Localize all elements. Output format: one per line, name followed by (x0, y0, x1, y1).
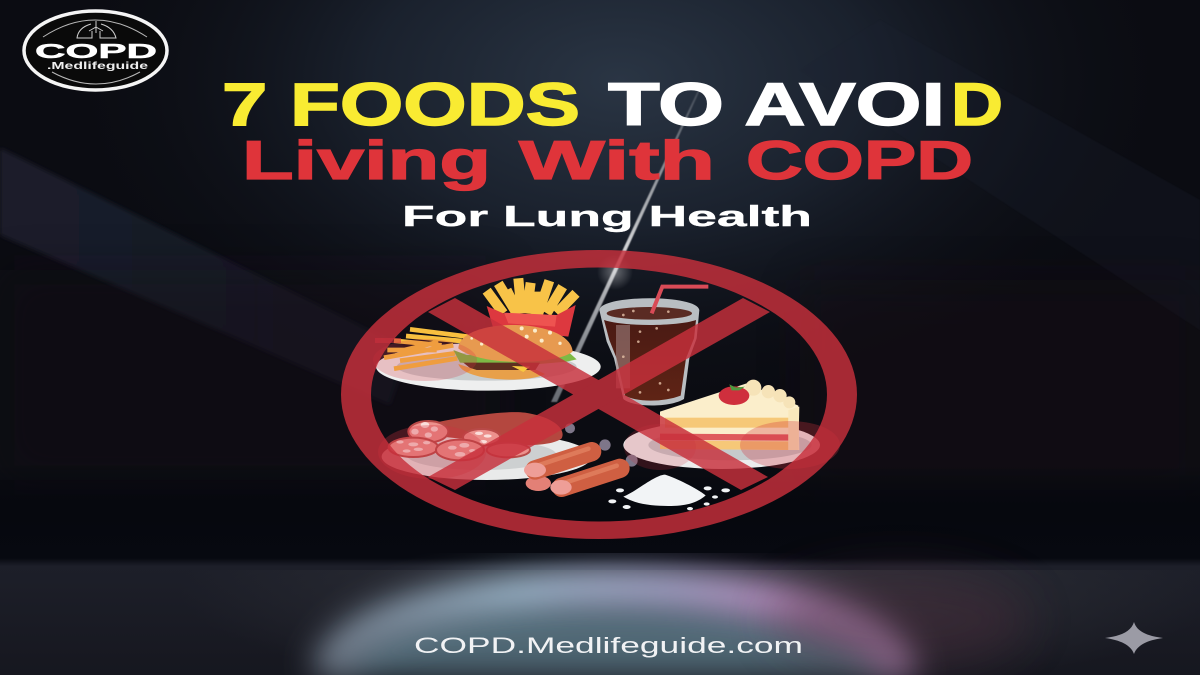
food illustration (376, 278, 820, 510)
plate tint overlays (373, 338, 840, 479)
title line 2: COPD (746, 129, 973, 191)
logo badge (24, 11, 167, 90)
title line 1 (222, 71, 1003, 138)
meat plate (382, 433, 592, 480)
subtitle: For Lung Health (402, 201, 812, 233)
burger plate group (376, 278, 601, 391)
title (222, 71, 1003, 233)
long sausage (432, 412, 563, 445)
salami slices (389, 421, 530, 460)
icon: sparkle (1105, 622, 1163, 654)
title line 1: D (951, 71, 1003, 138)
prohibition sign (341, 250, 857, 539)
title line 2: Living (242, 129, 491, 191)
drink and cake group (599, 287, 820, 469)
icon: lungs (77, 21, 116, 38)
straw (652, 287, 708, 313)
title line 2 (242, 129, 973, 191)
cake plate (623, 421, 820, 469)
logo subtitle: .Medlifeguide (47, 60, 148, 72)
burger (453, 325, 577, 380)
plate (376, 343, 601, 391)
light streak (551, 88, 701, 402)
cake slice (660, 380, 799, 450)
fries on plate (384, 329, 468, 369)
sausages (524, 423, 638, 495)
title line 1: TO AVOI (608, 71, 945, 138)
glass of cola (599, 287, 708, 405)
meats and salt group (382, 412, 730, 510)
title line 2: With (519, 129, 715, 191)
logo inner arcs (43, 20, 147, 84)
salt pile (608, 475, 730, 510)
logo (24, 11, 167, 90)
red ring and cross bars (341, 250, 857, 539)
floor glow (330, 570, 1030, 675)
title line 1: 7 FOODS (222, 71, 580, 138)
website url: COPD.Medlifeguide.com (414, 633, 803, 658)
strawberry (719, 384, 749, 405)
fries box (487, 278, 576, 337)
logo wordmark: COPD (35, 41, 157, 63)
